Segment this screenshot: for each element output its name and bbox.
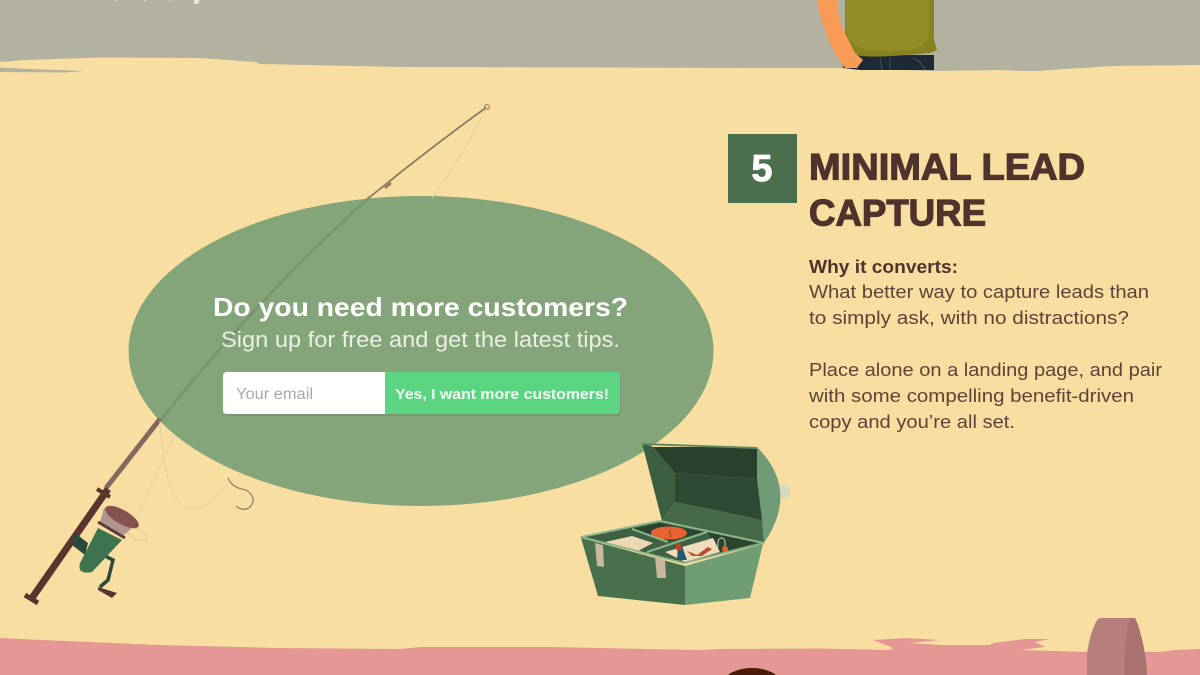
grey brush streak [0,68,85,72]
illustration: person from section above [817,0,937,70]
illustration: dark hair in next section [723,668,781,675]
text block: why it converts: to simply ask, with no distractions? [809,308,1129,328]
text block: why it converts: What better way to capture leads than [809,282,1149,302]
section number badge: 5 [751,148,773,190]
dark compartments [632,523,756,552]
form subheading: Sign up for free and get the latest tips. [221,327,620,352]
tackle left compartment [605,536,653,551]
lid outer side [750,447,780,543]
tackle red lure [687,547,712,556]
rod handle [32,489,108,598]
jeans [843,55,934,70]
fishing lines [137,107,487,516]
email signup form [213,292,628,416]
reel crank knob [98,587,117,598]
lid dark panel [675,473,762,520]
clipped caption fragment from section above [115,0,200,4]
reel spool [100,508,135,536]
illustration: fishing rod [25,104,490,603]
box rim and dividers [581,521,764,563]
reel cap [102,501,142,533]
bottom band: pink section [0,638,1200,675]
tackle blue lure [677,546,687,560]
heading: MINIMAL LEAD [809,146,1085,188]
latches [595,543,604,567]
fishing bobber [651,526,687,540]
callout: lead capture speech bubble [128,196,714,506]
illustration: tackle box [581,443,790,605]
lid left panel [642,443,675,521]
heading: CAPTURE [809,192,986,234]
submit button: Yes, I want more customers! [395,386,609,403]
reel [72,501,149,598]
metal hook [718,538,725,547]
box opening [581,521,764,563]
lid darkest panel [653,447,757,479]
tackle paper [665,538,720,562]
hinge tab [778,486,790,498]
text block: why it converts [808,257,1162,432]
top band: grey section [0,0,1200,71]
form heading: Do you need more customers? [213,292,628,322]
text block: why it converts: Why it converts: [809,257,958,277]
email input [223,372,386,414]
hook [228,478,253,509]
text block: why it converts: with some compelling benefit-driven [808,386,1134,406]
rod seen through the bubble [160,197,370,421]
rod guides [484,104,490,110]
box front [581,538,685,605]
email input: Your email [236,386,313,403]
illustration: object in next section [1087,618,1147,675]
lid bottom panel [662,502,764,543]
arm [817,0,863,68]
text block: why it converts: Place alone on a landing page, and pair [809,360,1162,380]
shirt [845,0,937,57]
reel bracket [72,533,88,555]
box side [685,544,763,605]
rod lower section [106,419,160,488]
rod tip section [370,107,487,197]
reel crank arm [100,555,113,587]
reel body [80,528,122,573]
heading [809,146,1085,234]
text block: why it converts: copy and you’re all set. [809,412,1015,432]
submit button [385,372,620,414]
section number badge [728,134,797,203]
reel line loop [125,524,149,544]
form shadow [224,374,621,416]
jeans seams [880,58,925,70]
lid top edge [642,443,757,449]
